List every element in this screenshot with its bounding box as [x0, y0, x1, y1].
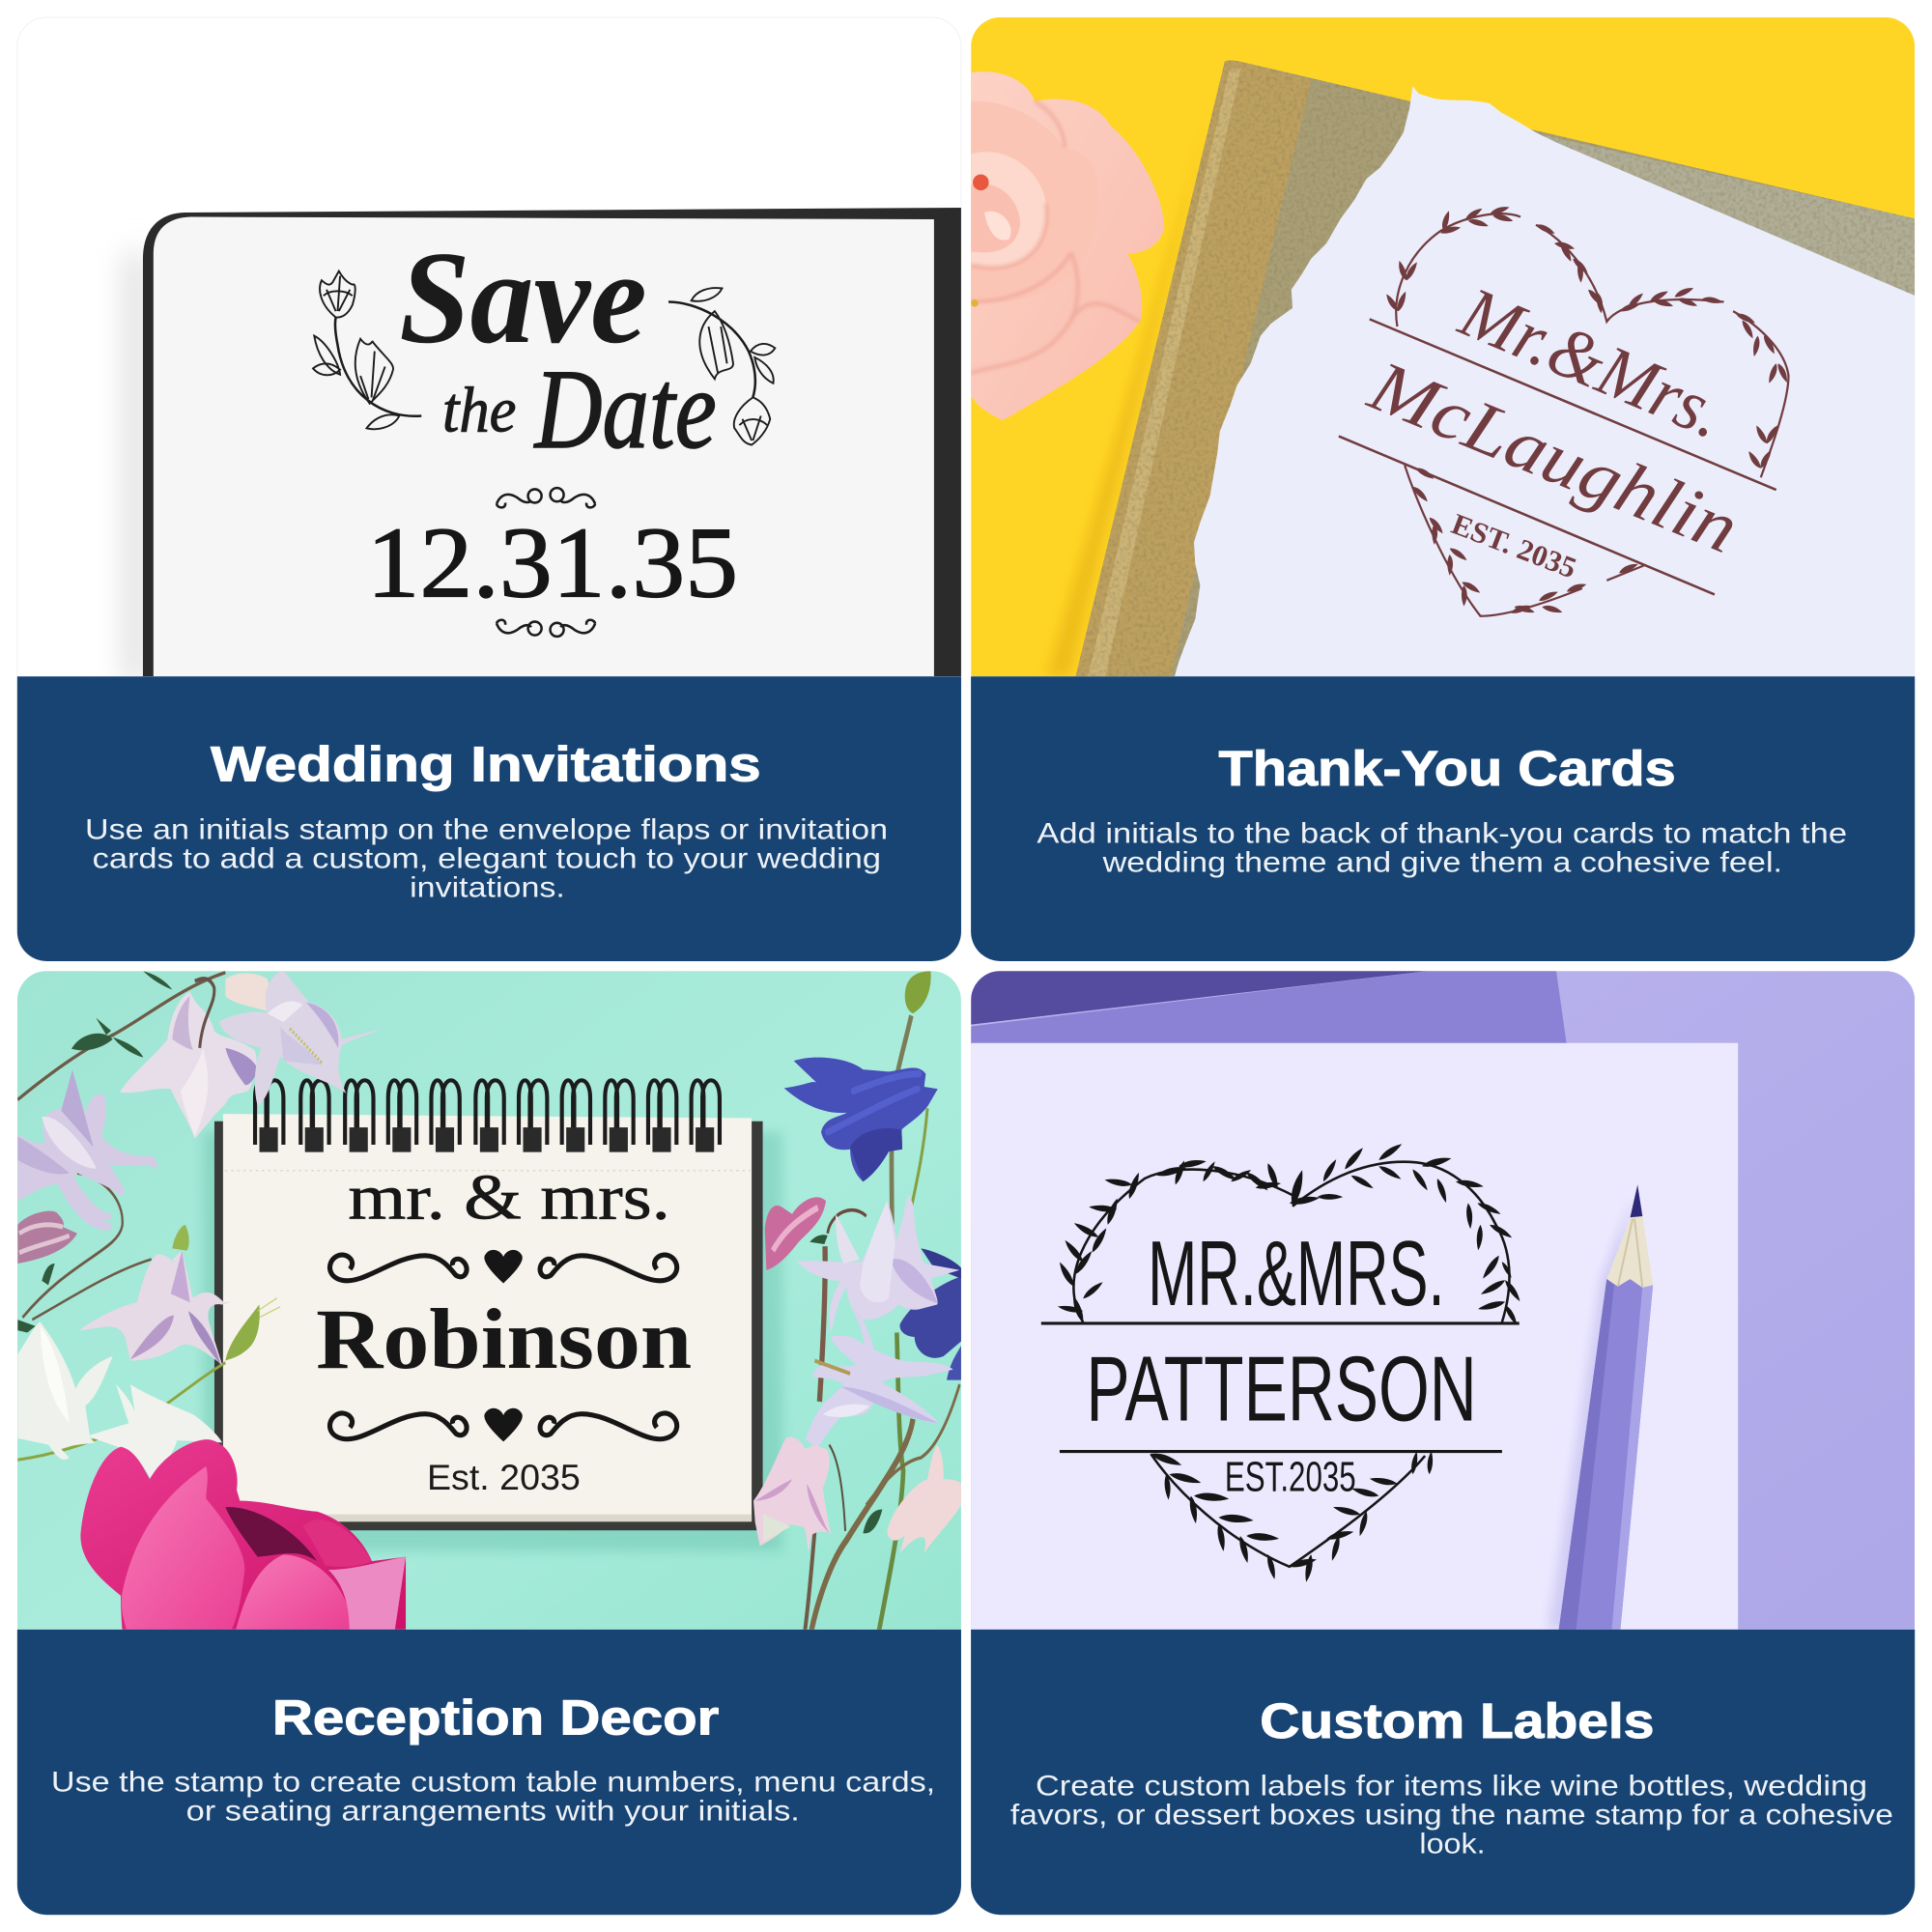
- icon: green bud right: [905, 971, 931, 1013]
- icon: blue columbine: [784, 1058, 938, 1181]
- icon: upper swirl with heart: [329, 1250, 677, 1283]
- heading: custom labels: Custom Labels: [1260, 1693, 1654, 1748]
- text block: wedding invitations description: [85, 814, 888, 904]
- icon: pink-white flower lower left of stems: [753, 1436, 831, 1552]
- heading: wedding invitations: Wedding Invitations: [211, 737, 761, 792]
- icon: left stems: [17, 973, 225, 1460]
- icon: pink bud left: [17, 1211, 77, 1264]
- caption panel: custom labels: [971, 1630, 1915, 1915]
- text block: thank-you cards description: [1037, 818, 1847, 878]
- panel: custom labels: [971, 971, 1915, 1915]
- text: McLaughlin: McLaughlin: [1358, 346, 1749, 569]
- text block: custom labels description: Create custom labels for items like wine bottles, wedding: [1036, 1770, 1867, 1802]
- icon: pencil shadow: [1548, 1194, 1634, 1630]
- caption panel: wedding invitations: [17, 676, 961, 961]
- icon: right floral sprig: [668, 288, 775, 444]
- panel: wedding invitations: [17, 17, 961, 961]
- icon: white flowers lower left: [17, 1321, 222, 1477]
- text: mr. & mrs.: mr. & mrs.: [348, 1162, 670, 1233]
- flowers: left cluster traced: [17, 970, 406, 1633]
- text: Save: Save: [399, 224, 647, 371]
- icon: left floral sprig: [313, 271, 421, 429]
- text block: wedding invitations description: cards to add a custom, elegant touch to your wedding: [93, 843, 881, 875]
- photo: stamped paper with purple pencil: [971, 971, 1915, 1631]
- photo: notebook among flowers on teal: [17, 970, 961, 1633]
- icon: lilac flower lower right: [805, 1307, 953, 1451]
- text: Robinson: Robinson: [316, 1292, 692, 1387]
- text block: custom labels description: favors, or dessert boxes using the name stamp for a cohesive: [1010, 1799, 1893, 1831]
- icon: notebook: [214, 1080, 763, 1530]
- icon: lower swirl with heart: [329, 1408, 677, 1441]
- icon: rose: [971, 71, 1164, 420]
- flowers: right cluster traced: [753, 971, 961, 1631]
- icon: pencil: [1559, 1184, 1653, 1631]
- text block: reception decor description: [51, 1767, 935, 1828]
- icon: heart wreath stamp: [1041, 1141, 1522, 1582]
- caption panel: thank-you cards: [971, 676, 1915, 961]
- icon: stem leaves: [17, 971, 172, 1332]
- icon: heart wreath stamp: [1339, 204, 1790, 616]
- text: Date: Date: [533, 346, 717, 472]
- icon: top lilac flower: [219, 970, 382, 1106]
- icon: right stems: [805, 1015, 959, 1631]
- text block: thank-you cards description: Add initials to the back of thank-you cards to match the: [1037, 818, 1847, 850]
- text: Est. 2035: EST. 2035: [1447, 507, 1581, 584]
- heading: thank-you cards: Thank-You Cards: [1218, 741, 1676, 796]
- text block: custom labels description: look.: [1419, 1828, 1486, 1860]
- heading: reception decor: Reception Decor: [272, 1690, 719, 1745]
- caption panel: reception decor: [17, 1630, 961, 1915]
- icon: cream bud top: [225, 974, 270, 1011]
- text: date numerals: 12.31.35: [366, 505, 738, 618]
- icon: lower flourish: [497, 620, 595, 637]
- icon: upper flourish: [497, 488, 595, 507]
- icon: top-left pink lilac flower: [120, 979, 258, 1139]
- icon: leaves right: [810, 1235, 882, 1533]
- photo: notebook with save the date stamp: [127, 208, 961, 684]
- icon: pink peony: [80, 1439, 406, 1633]
- text: Est. 2035: EST.2035: [1225, 1454, 1356, 1500]
- photo: stamped torn paper on yellow: [971, 17, 1918, 684]
- icon: green buds: [172, 1225, 280, 1361]
- text block: wedding invitations description: Use an initials stamp on the envelope flaps or invitation: [85, 814, 888, 846]
- text block: reception decor description: Use the stamp to create custom table numbers, menu cards,: [51, 1767, 935, 1799]
- text: Est. 2035: Est. 2035: [427, 1458, 581, 1497]
- icon: gold-edged book: [1076, 61, 1915, 676]
- icon: pink-white flower right: [887, 1445, 961, 1552]
- panel: thank-you cards: [971, 17, 1918, 961]
- icon: paper sheet: [971, 1043, 1738, 1631]
- text block: custom labels description: [1010, 1770, 1893, 1860]
- icon: pink bud right: [765, 1197, 826, 1270]
- icon: lilac flower upper right: [797, 1195, 959, 1332]
- text: the: the: [442, 374, 516, 445]
- text block: thank-you cards description: wedding theme and give them a cohesive feel.: [1101, 846, 1782, 878]
- icon: torn paper sheet: [1173, 86, 1918, 684]
- panel: reception decor: [17, 970, 961, 1915]
- text: Mr. & Mrs.: Mr.&Mrs.: [1449, 271, 1736, 454]
- icon: left lilac flower: [17, 1069, 156, 1231]
- text: Mr. & Mrs.: MR.&MRS.: [1148, 1222, 1445, 1325]
- text block: reception decor description: or seating arrangements with your initials.: [186, 1796, 800, 1828]
- icon: blue flower behind: [900, 1248, 961, 1380]
- text block: wedding invitations description: invitations.: [410, 872, 565, 904]
- icon: center-left pink lilac flower: [79, 1251, 232, 1365]
- text: Patterson: PATTERSON: [1086, 1338, 1477, 1441]
